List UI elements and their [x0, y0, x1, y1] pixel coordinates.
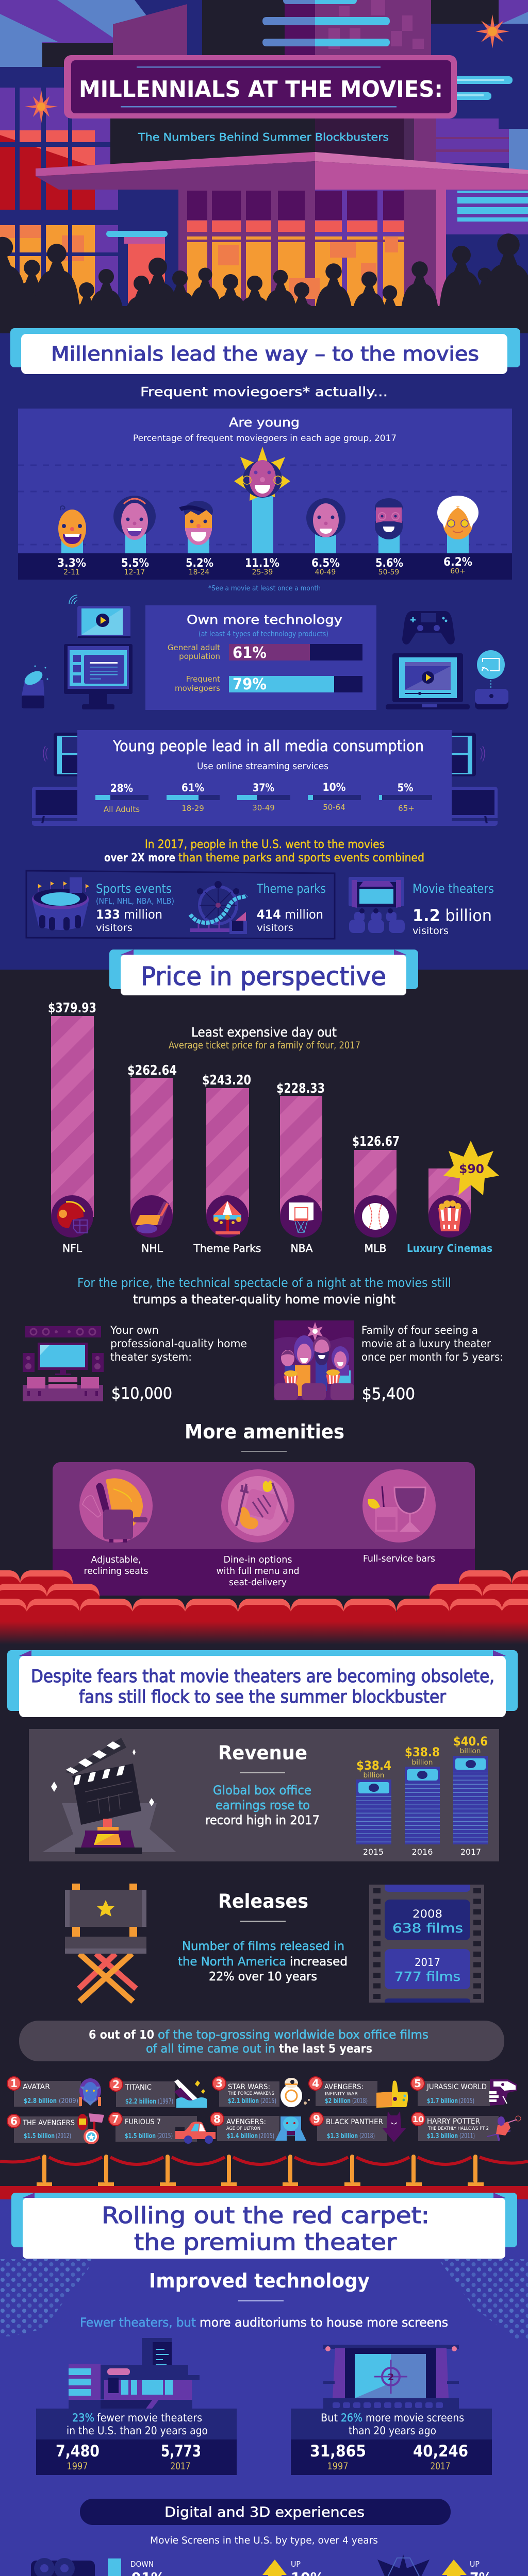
icon: hockey stick and puck: [135, 1201, 169, 1233]
panel: revenue: [29, 1729, 499, 1861]
icon: black panther: [382, 2111, 406, 2142]
list: top-grossing films: (2018): [352, 2097, 368, 2105]
list: top-grossing films: $2.8 billion: [24, 2097, 57, 2105]
panel: young people lead in media consumption: 28%: [110, 782, 133, 794]
age group values: 60+: [450, 567, 466, 575]
panel: young people lead in media consumption: 61%: [182, 782, 204, 794]
face: 40-49: [306, 498, 345, 537]
icon: baseball: [362, 1203, 389, 1230]
age group values: [57, 556, 472, 577]
callout: over 2X more: over 2X more: [104, 852, 175, 865]
list: top-grossing films: AVENGERS:: [226, 2118, 266, 2126]
list: top-grossing films: (2015): [260, 2097, 276, 2105]
chart: money stacks: billion: [411, 1759, 433, 1767]
panel: more screens: 26%: [341, 2412, 362, 2424]
statement: fewer theaters, more screens: [80, 2315, 448, 2330]
panel: own more technology: General adult: [168, 643, 220, 652]
icon: smart speaker: [22, 666, 48, 708]
panel: more screens: But: [321, 2412, 338, 2424]
callout: 6 out of 10: of the top-grossing worldwide box office films: [158, 2028, 428, 2042]
panel: young people lead in media consumption: 65+: [398, 804, 415, 813]
panel: more screens: [291, 2345, 492, 2475]
text: home theater cost: [110, 1324, 247, 1403]
panel: are young: Are young: [229, 415, 300, 430]
chart: least expensive day out bars: $262.64: [127, 1063, 177, 1078]
section background: millennials: [0, 333, 528, 970]
statement: technical spectacle: trumps a theater-quality home movie night: [133, 1292, 395, 1307]
panel: young people lead in media consumption: Use online streaming services: [197, 761, 328, 772]
panel: more amenities: Adjustable,: [91, 1554, 141, 1565]
panel: revenue: earnings rose to: [216, 1798, 310, 1812]
stat: film-based: [31, 2558, 165, 2576]
list: top-grossing films: (2018): [359, 2132, 375, 2140]
icon: avatar: [79, 2078, 101, 2106]
chart: least expensive day out bars: Theme Parks: [193, 1242, 261, 1255]
list: top-grossing films: 3: [216, 2077, 223, 2090]
panel: sports events and theme parks: [26, 871, 335, 939]
panel: sports events and theme parks: 414 million: [257, 907, 323, 922]
subheading: frequent moviegoers: Frequent moviegoers* actually...: [140, 384, 388, 399]
icon: home theater system: [23, 1326, 104, 1401]
callout: over 2X more: than theme parks and sports events combined: [178, 852, 424, 865]
icon: carousel: [213, 1201, 241, 1234]
crowd silhouettes: [0, 233, 528, 354]
icon: price star: [443, 1141, 499, 1195]
panel: young people lead in media consumption: 10%: [323, 781, 345, 793]
text: releases: Number of films released in: [182, 1940, 344, 1953]
panel: revenue: record high in 2017: [205, 1813, 320, 1827]
list: top-grossing films: 2: [112, 2078, 120, 2091]
heading ribbon: despite fears: [7, 1650, 518, 1717]
list: top-grossing films: BLACK PANTHER: [326, 2118, 383, 2126]
list: top-grossing films: (2015): [459, 2097, 474, 2105]
list: top-grossing films: (2012): [56, 2132, 71, 2140]
text: luxury theater cost: $5,400: [362, 1385, 415, 1403]
icon: film strip with release counts: 638 films: [392, 1921, 463, 1936]
panel: sports events and theme parks: visitors: [257, 922, 293, 934]
chart: least expensive day out bars: Least expensive day out: [191, 1025, 337, 1040]
age group values: 40-49: [315, 568, 336, 577]
statement: technical spectacle: [77, 1276, 451, 1307]
list: top-grossing films: $1.7 billion: [427, 2097, 458, 2105]
icon: avengers helmet hammer shield: [77, 2113, 104, 2144]
chart: least expensive day out bars: [48, 1001, 499, 1255]
panel: are young: Percentage of frequent moviegoers in each age group, 2017: [133, 433, 397, 444]
age group values: 5.2%: [186, 557, 213, 570]
panel: fewer theaters: 7,480: [56, 2442, 100, 2461]
text: home theater cost: theater system:: [110, 1351, 192, 1363]
heading ribbon: rolling out the red carpet: the premium theater: [134, 2229, 397, 2256]
list: top-grossing films: THE AVENGERS: [22, 2119, 75, 2127]
icon: film strip with release counts: [369, 1885, 484, 2003]
list: top-grossing films: JURASSIC WORLD: [426, 2083, 487, 2091]
icon: streaming cast device: [475, 650, 508, 709]
heading ribbon: rolling out the red carpet: [11, 2193, 517, 2259]
icon: game controller: [402, 611, 455, 645]
list: top-grossing films: 4: [312, 2077, 319, 2090]
text: luxury theater cost: Family of four seeing a: [361, 1324, 478, 1336]
chart: money stacks: 2016: [411, 1847, 433, 1857]
icon: 3D glasses: [370, 2554, 435, 2576]
stat: digital non-3D: [192, 2560, 324, 2576]
icon: clapperboard trophy: [42, 1738, 176, 1854]
section background: price and beyond: [0, 970, 528, 2199]
list: top-grossing films: AVATAR: [23, 2083, 50, 2091]
heading pill: digital and 3D: Digital and 3D experiences: [164, 2504, 365, 2520]
panel: own more technology: Frequent: [186, 674, 220, 684]
right of sign: [436, 76, 528, 170]
list: top-grossing films: $1.3 billion: [427, 2132, 458, 2140]
icon: stadium: [32, 877, 89, 930]
heading ribbon: rolling out the red carpet: Rolling out the red carpet:: [102, 2202, 430, 2229]
icon: football helmet: [57, 1202, 87, 1233]
list: top-grossing films: $1.4 billion: [227, 2132, 258, 2140]
age group values: 3.3%: [57, 557, 86, 570]
list: top-grossing films: 7: [112, 2113, 119, 2125]
panel: young people lead in media consumption: 30-49: [252, 803, 275, 812]
panel: are young: [18, 409, 512, 580]
face: 18-24: [179, 501, 213, 545]
caption: movie screens by type: Movie Screens in the U.S. by type, over 4 years: [150, 2535, 378, 2546]
heading ribbon: despite fears: fans still flock to see the summer blockbuster: [79, 1687, 446, 1707]
hero: theater facade illustration: [0, 0, 528, 309]
panel: sports events and theme parks: (NFL, NHL, NBA, MLB): [96, 896, 174, 906]
panel: fewer theaters: [36, 2338, 237, 2475]
panel: own more technology: Own more technology: [187, 613, 342, 627]
heading ribbon: millennials lead the way: Millennials lead the way – to the movies: [51, 343, 479, 365]
panel: sports events and theme parks: Sports events: [96, 882, 172, 896]
icon: ferris wheel and coaster: [190, 881, 247, 934]
chart: money stacks: $38.8: [405, 1745, 440, 1759]
face: 12-17: [113, 496, 156, 540]
text: releases: increased: [290, 1955, 348, 1969]
panel: young people lead in media consumption: 37%: [253, 782, 274, 794]
title: MILLENNIALS AT THE MOVIES:: [79, 76, 443, 103]
icon: dine-in plate: [228, 1476, 288, 1536]
heading ribbon: millennials lead the way: [10, 328, 520, 374]
icon: director's chair: [65, 1884, 146, 2002]
panel: more screens: than 20 years ago: [349, 2425, 436, 2437]
section background: premium theater: [0, 2199, 528, 2576]
list: top-grossing films: 8: [213, 2113, 221, 2125]
icon: movie theater screen: [349, 877, 405, 933]
list: top-grossing films: $1.5 billion: [24, 2132, 55, 2140]
panel: fewer theaters: 1997: [67, 2461, 88, 2472]
icon: screen and curtains: 2: [388, 2372, 394, 2383]
icon: infinity gauntlet: [376, 2080, 408, 2108]
icon: film strip with release counts: 2008: [412, 1908, 442, 1920]
panel: own more technology: 61%: [233, 644, 267, 662]
heading ribbon: price in perspective: Price in perspective: [141, 962, 386, 991]
panel: fewer theaters: in the U.S. than 20 years ago: [67, 2425, 208, 2437]
list: top-grossing films: THE FORCE AWAKENS: [227, 2091, 274, 2096]
text: home theater cost: $10,000: [111, 1384, 172, 1403]
panel: more amenities: Dine-in options: [224, 1554, 292, 1565]
list: top-grossing films: $2 billion: [325, 2097, 351, 2105]
heading ribbon: price in perspective: [109, 950, 418, 995]
rank badges: [7, 2077, 425, 2128]
age group values: 5.6%: [375, 557, 403, 570]
callout: over 2X more: [104, 838, 424, 865]
face: 60+: [437, 496, 478, 539]
face: 2-11: [58, 506, 86, 548]
panel: own more technology: [145, 605, 376, 710]
icon: dinosaur skeleton: [490, 2079, 517, 2106]
chart: least expensive day out bars: MLB: [364, 1242, 387, 1255]
heading: more amenities: More amenities: [185, 1420, 344, 1443]
icon: desktop monitor: [64, 644, 133, 709]
panel: fewer theaters: 2017: [170, 2461, 191, 2472]
panel: more amenities: with full menu and: [217, 1566, 299, 1577]
icon: film strip with release counts: 2017: [415, 1956, 440, 1969]
panel: young people lead in media consumption: All Adults: [104, 805, 140, 814]
panel: more amenities: seat-delivery: [229, 1577, 287, 1588]
panel: sports events and theme parks: Theme parks: [256, 882, 326, 896]
statement: technical spectacle: For the price, the technical spectacle of a night at the movies still: [77, 1276, 451, 1290]
chart: money stacks: [356, 1734, 488, 1857]
list: top-grossing films: [7, 2077, 521, 2144]
panel: sports events and theme parks: 133 million: [96, 907, 162, 922]
callout: over 2X more: In 2017, people in the U.S. went to the movies: [145, 838, 385, 851]
list: top-grossing films: THE DEATHLY HALLOWS PT 2: [427, 2126, 489, 2131]
panel: more amenities: [53, 1462, 475, 1596]
panel: own more technology: population: [179, 652, 220, 661]
list: top-grossing films: INFINITY WAR: [325, 2092, 358, 2097]
icon: sinking ship: [174, 2079, 207, 2108]
icon: BB-8: [280, 2078, 310, 2107]
age group values: 25-39: [252, 568, 273, 577]
panel: own more technology: 79%: [233, 675, 267, 693]
heading: improved technology: Improved technology: [149, 2269, 370, 2292]
panel: fewer theaters: 23%: [72, 2412, 94, 2424]
text: movie theaters: visitors: [412, 925, 449, 937]
icon: drinks: [368, 1486, 425, 1532]
panel: own more technology: moviegoers: [175, 684, 220, 693]
under-sign wall: [110, 118, 436, 165]
icon: cinema building: [69, 2338, 200, 2409]
chart: money stacks: $38.4: [356, 1758, 391, 1773]
list: top-grossing films: AVENGERS:: [324, 2083, 364, 2091]
list: top-grossing films: 5: [414, 2077, 421, 2090]
callout: 6 out of 10: [19, 2021, 504, 2061]
chart: least expensive day out bars: Average ticket price for a family of four, 2017: [169, 1040, 360, 1051]
icon: ultron: [275, 2116, 306, 2141]
face: 25-39: [234, 447, 290, 501]
panel: young people lead in media consumption: 50-64: [323, 803, 345, 812]
panel: more screens: more movie screens: [366, 2412, 464, 2424]
list: top-grossing films: 1: [10, 2077, 18, 2090]
stat: digital 3D: UP: [470, 2560, 480, 2569]
panel: young people lead in media consumption: [32, 730, 498, 826]
icon: popcorn: [438, 1200, 461, 1231]
stat: digital non-3D: UP: [291, 2560, 301, 2569]
panel: more screens: 31,865: [310, 2442, 366, 2461]
heading pill: digital and 3D: [80, 2499, 451, 2525]
icon: reclining seat: [82, 1478, 147, 1543]
panel: fewer theaters: fewer movie theaters: [97, 2412, 202, 2424]
panel: more amenities: reclining seats: [84, 1566, 148, 1577]
panel: young people lead in media consumption: 5%: [397, 782, 414, 794]
list: top-grossing films: $1.5 billion: [125, 2132, 156, 2140]
chart: money stacks: 2015: [363, 1847, 384, 1857]
icon: harry potter: [487, 2116, 521, 2141]
text: releases: Releases: [218, 1890, 308, 1912]
icon: price star: $90: [459, 1162, 484, 1176]
illustration: theater seat rows: [0, 1570, 528, 1645]
chart: least expensive day out bars: $379.93: [48, 1001, 96, 1016]
text: releases: the North America: [178, 1955, 286, 1969]
text: movie theaters: 1.2 billion: [412, 906, 492, 925]
icon: red car: [175, 2122, 216, 2144]
panel: fewer theaters: 5,773: [161, 2442, 201, 2461]
list: top-grossing films: TITANIC: [125, 2083, 152, 2092]
panel: more amenities: Full-service bars: [363, 1553, 435, 1564]
list: top-grossing films: 10: [412, 2114, 424, 2124]
panel: young people lead in media consumption: Young people lead in all media consumption: [112, 737, 424, 755]
list: top-grossing films: (1997): [158, 2098, 173, 2106]
list: top-grossing films: FURIOUS 7: [125, 2118, 161, 2126]
list: top-grossing films: $1.3 billion: [327, 2132, 358, 2140]
heading ribbon: despite fears: Despite fears that movie theaters are becoming obsolete,: [31, 1666, 494, 1687]
sign: [64, 55, 457, 118]
panel: sports events and theme parks: visitors: [96, 922, 133, 934]
callout: 6 out of 10: the last 5 years: [279, 2042, 372, 2056]
chart: least expensive day out bars: NFL: [62, 1242, 82, 1255]
footnote: *See a movie at least once a month: [208, 585, 321, 592]
list: top-grossing films: (2015): [259, 2132, 274, 2140]
list: top-grossing films: $2.2 billion: [125, 2098, 156, 2106]
callout: 6 out of 10: 6 out of 10: [89, 2028, 154, 2042]
icon: laptop: [386, 653, 470, 709]
icon: screen and curtains: [323, 2345, 459, 2409]
list: top-grossing films: 6: [10, 2115, 18, 2127]
panel: own more technology: (at least 4 types of technology products): [199, 630, 328, 638]
subtitle: The Numbers Behind Summer Blockbusters: [138, 131, 389, 143]
illustration: velvet ropes: [0, 2155, 528, 2199]
chart: money stacks: 2017: [460, 1847, 481, 1857]
left windows: [0, 88, 178, 309]
chart: least expensive day out bars: NBA: [291, 1242, 313, 1255]
callout: 6 out of 10: of all time came out in: [146, 2042, 275, 2056]
chart: least expensive day out bars: $126.67: [352, 1134, 400, 1149]
text: releases: [178, 1890, 348, 1984]
panel: revenue: Global box office: [213, 1783, 311, 1798]
face: 50-59: [375, 498, 403, 539]
awning: [36, 152, 528, 190]
age group values: 2-11: [63, 568, 80, 577]
icon: tablet: [69, 595, 130, 638]
text: luxury theater cost: [361, 1324, 503, 1403]
icon: film strip with release counts: 777 films: [394, 1969, 460, 1984]
text: releases: 22% over 10 years: [209, 1970, 317, 1984]
age group values: 11.1%: [245, 557, 279, 570]
age group values: 6.5%: [311, 557, 340, 570]
age group values: 12-17: [124, 568, 145, 577]
stat: film-based: DOWN: [130, 2560, 154, 2569]
panel: revenue: Revenue: [218, 1742, 307, 1764]
panel: more screens: 40,246: [413, 2442, 468, 2461]
list: top-grossing films: (2015): [157, 2132, 173, 2140]
statement: fewer theaters, more screens: Fewer theaters, but: [80, 2315, 196, 2330]
chart: money stacks: $40.6: [453, 1734, 488, 1749]
text: luxury theater cost: movie at a luxury theater: [361, 1337, 491, 1350]
list: top-grossing films: HARRY POTTER: [427, 2117, 480, 2126]
chart: least expensive day out bars: NHL: [141, 1242, 163, 1255]
list: top-grossing films: AGE OF ULTRON: [226, 2126, 260, 2131]
panel: young people lead in media consumption: 18-29: [182, 804, 204, 813]
chart: least expensive day out bars: $243.20: [202, 1073, 251, 1088]
list: top-grossing films: (2009): [59, 2097, 78, 2105]
list: top-grossing films: STAR WARS:: [228, 2083, 270, 2091]
chart: money stacks: billion: [363, 1772, 385, 1780]
list: top-grossing films: 9: [313, 2113, 320, 2125]
chart: money stacks: billion: [460, 1748, 481, 1755]
panel: more screens: 2017: [430, 2461, 451, 2472]
icon: film projector: [31, 2558, 95, 2576]
statement: fewer theaters, more screens: more auditoriums to house more screens: [200, 2315, 448, 2330]
age group values: 5.5%: [121, 557, 149, 570]
stat: digital 3D: [370, 2554, 497, 2576]
entrance: [178, 190, 528, 309]
icon: family at the movies: [274, 1320, 354, 1400]
chart: least expensive day out bars: $228.33: [276, 1081, 325, 1096]
icon: basketball hoop: [289, 1202, 314, 1232]
text: movie theaters: Movie theaters: [412, 882, 494, 896]
age group values: 18-24: [189, 568, 209, 577]
text: home theater cost: professional-quality home: [110, 1337, 247, 1350]
text: movie theaters: [412, 882, 494, 937]
text: luxury theater cost: once per month for 5 years:: [361, 1351, 503, 1363]
list: top-grossing films: $2.1 billion: [228, 2097, 259, 2105]
age group values: 6.2%: [443, 556, 472, 569]
list: top-grossing films: (2011): [459, 2132, 475, 2140]
chart: least expensive day out bars: Luxury Cinemas: [407, 1242, 492, 1255]
age group values: 50-59: [378, 568, 399, 577]
text: home theater cost: Your own: [110, 1324, 159, 1336]
panel: more screens: 1997: [327, 2461, 349, 2472]
